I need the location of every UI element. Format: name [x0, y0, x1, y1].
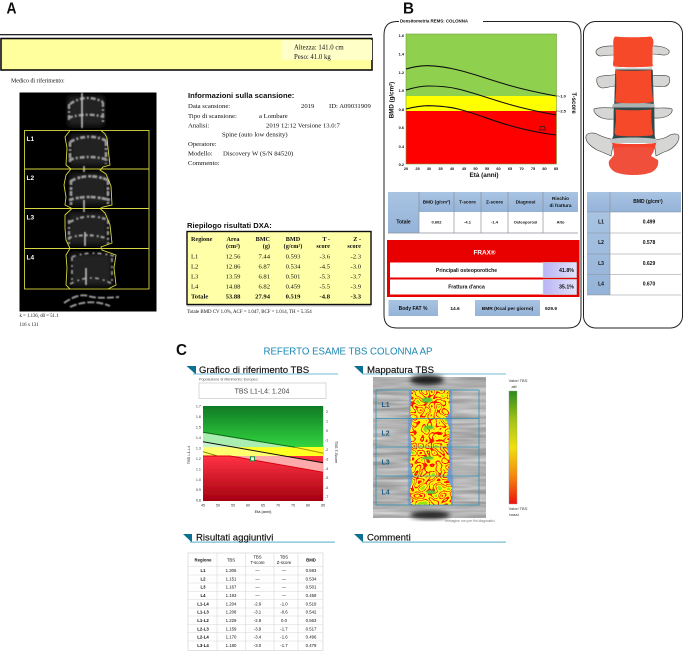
additional results table: 0.534: [306, 576, 317, 582]
vertebra BMD table: L2: [598, 240, 604, 246]
vertebra BMD table: 0.670: [643, 282, 655, 288]
DXA results table: 6.81: [258, 274, 270, 280]
TBS chart: 45: [201, 504, 205, 508]
additional results table: Regione: [195, 558, 212, 562]
DXA spine scan: [20, 92, 156, 312]
spine panel frame: [584, 22, 682, 328]
heading: TBS mapping: [354, 365, 506, 376]
DXA spine scan: L1: [26, 136, 34, 143]
DXA results table: L2: [191, 264, 198, 270]
TBS chart: 1.3: [196, 446, 201, 450]
additional results table: 0.517: [306, 626, 317, 632]
scan information: Analisi:: [188, 122, 209, 130]
label A: A: [6, 0, 17, 18]
additional results table: 1.151: [226, 576, 237, 582]
BMD age chart: 0.8: [399, 107, 405, 112]
additional results table: L1-L3: [197, 610, 209, 614]
heading: comments: [354, 532, 506, 544]
DXA results table: score: [347, 243, 361, 250]
TBS map image: [373, 375, 486, 519]
additional results table: L2: [200, 576, 206, 582]
additional results table: -1.7: [280, 626, 288, 632]
TBS chart: 85: [321, 504, 325, 508]
FRAX box: [387, 240, 580, 297]
DXA results table: 14.88: [226, 284, 241, 290]
BMD age chart: T-score: [570, 92, 576, 114]
TBS chart: 65: [261, 504, 265, 508]
summary table: Rischio: [552, 196, 569, 201]
BMD age chart: 1.4: [399, 52, 405, 56]
table footnote: Totale BMD CV 1.0%, ACF = 1.047, BCF = 1.014, TH = 5.354: [187, 310, 312, 315]
TBS chart: 1.4: [196, 436, 201, 440]
summary table: -1.4: [491, 220, 499, 224]
chart title: Densitometria REMS: COLONNA: [400, 18, 469, 24]
scan information: a Lombare: [259, 113, 288, 120]
vertebra BMD table: L3: [598, 261, 604, 267]
additional results table: BMD: [306, 558, 316, 562]
BMD age chart: 0.2: [399, 162, 405, 167]
DXA results table: 53.88: [226, 294, 241, 300]
TBS value box: [199, 383, 326, 398]
additional results table: -1.7: [280, 643, 288, 648]
body fat and BMR: 14.6: [450, 306, 460, 312]
DXA results table: -5.3: [320, 274, 331, 280]
additional results table: 1.170: [226, 634, 237, 640]
additional results table: 0.0: [281, 618, 288, 623]
TBS colour scale: Valori TBS: [509, 378, 528, 383]
additional results table: —: [255, 584, 260, 590]
TBS chart: 1.1: [196, 468, 201, 472]
BMD age chart: 75: [531, 166, 536, 171]
additional results table: T-score: [250, 560, 265, 565]
DXA results table: [187, 232, 371, 306]
DXA results table: L3: [191, 274, 199, 280]
BMD age chart: [388, 33, 576, 179]
additional results table: TBS: [280, 554, 288, 560]
body fat and BMR: Body FAT %: [399, 306, 428, 312]
BMD age chart: Età (anni): [469, 172, 499, 179]
summary table: -4.1: [464, 220, 472, 224]
additional results table: 0.563: [306, 618, 317, 623]
additional results table: 1.208: [226, 610, 237, 614]
TBS chart: 80: [306, 504, 310, 508]
TBS chart: 60: [246, 504, 250, 508]
additional results table: -3.9: [254, 626, 262, 632]
BMD age chart: 25: [415, 166, 420, 171]
DXA results table: 7.44: [258, 254, 271, 260]
scan caption: [20, 314, 59, 328]
additional results table: TBS: [253, 554, 262, 560]
DXA spine scan: L2: [26, 175, 34, 182]
additional results table: 1.167: [226, 584, 237, 590]
body fat and BMR: 929.9: [545, 306, 557, 312]
DXA results table: (g/cm²): [284, 243, 302, 250]
vertebra BMD table: 0.578: [643, 240, 655, 246]
BMD age chart: 1.2: [399, 70, 405, 75]
additional results table: L1-L4: [197, 602, 209, 606]
additional results table: 1.193: [226, 593, 237, 598]
additional results table: L4: [200, 593, 206, 598]
DXA results table: -2.3: [351, 254, 362, 260]
TBS map image: L4: [382, 490, 390, 496]
BMD age chart: 40: [450, 166, 454, 171]
TBS chart: -2: [325, 448, 328, 452]
DXA results table: Z -: [353, 236, 361, 243]
DXA results table: T -: [322, 236, 330, 243]
vertebra BMD table: [587, 192, 681, 295]
scan information: Spine (auto low density): [222, 132, 288, 138]
additional results table: 0.459: [306, 593, 317, 598]
additional results table: —: [255, 568, 260, 573]
heading: additional results: [183, 532, 335, 544]
summary table: Osteoporosi: [514, 220, 537, 224]
additional results table: Z-score: [277, 560, 292, 565]
BMD age chart: 30: [427, 166, 431, 171]
summary table: 0.602: [431, 220, 442, 224]
BMD age chart: 50: [473, 166, 478, 171]
TBS chart: 1.6: [196, 415, 201, 419]
BMD age chart: 1.0: [399, 88, 404, 93]
panel B: REMS densitometry: [384, 0, 682, 328]
report title: REFERTO ESAME TBS COLONNA AP: [263, 346, 433, 358]
TBS chart: -5: [325, 476, 328, 480]
additional results table: -3.1: [254, 610, 262, 614]
vertebra BMD table: 0.629: [643, 261, 655, 267]
additional results table: -1.0: [280, 602, 288, 606]
heading: TBS mapping: Mappatura TBS: [367, 365, 434, 376]
additional results table: -3.4: [254, 634, 262, 640]
TBS map image: L2: [382, 430, 390, 438]
vertebra BMD table: L4: [598, 282, 604, 288]
TBS map image: L1: [382, 402, 390, 409]
summary table: [388, 192, 578, 233]
DXA results table: 13.59: [226, 274, 241, 280]
BMD age chart: -1.0: [559, 94, 567, 98]
DXA results table: -4.5: [320, 264, 331, 270]
scan information: Operatore:: [188, 141, 217, 148]
scan information: ID: A09031909: [329, 103, 371, 110]
vertebra BMD table: 0.499: [643, 220, 655, 226]
FRAX box: 41.8%: [559, 268, 574, 274]
BMD age chart: 60: [496, 166, 501, 171]
additional results table: 0.542: [306, 610, 317, 614]
DXA results table: 12.86: [226, 264, 241, 270]
additional results table: —: [282, 576, 287, 582]
scan information: Commento:: [188, 160, 220, 167]
TBS chart: [186, 404, 339, 514]
BMD age chart: 1.6: [399, 33, 405, 38]
additional results table: -1.6: [280, 634, 288, 640]
TBS colour scale: [509, 378, 528, 517]
TBS colour scale: bassi: [509, 512, 519, 517]
scan information: 2019 12:12 Versione 13.0:7: [266, 122, 340, 130]
additional results table: -0.6: [280, 610, 288, 614]
additional results table: 0.501: [306, 584, 317, 590]
population note: Popolazione di riferimento: Europeo: [199, 378, 258, 382]
body fat and BMR: BMR (Kcal per giorno): [482, 306, 534, 312]
scan information: 2019: [301, 103, 315, 110]
scan caption: 116 x 131: [20, 323, 39, 328]
patient banner: [0, 34, 372, 70]
additional results table: 0.519: [306, 602, 317, 606]
TBS chart: 1.0: [196, 478, 201, 482]
BMD age chart: -2.5: [559, 108, 567, 114]
heading: TBS reference chart: Grafico di riferimento TBS: [199, 365, 309, 376]
FRAX box: Frattura d'anca: [448, 284, 485, 290]
DXA results table: 12.56: [226, 254, 241, 260]
TBS chart: -4: [325, 467, 328, 471]
label B: B: [403, 0, 414, 18]
DXA results table: (cm²): [226, 243, 240, 250]
additional results table: 1.306: [226, 568, 237, 573]
additional results table: 0.496: [306, 634, 317, 640]
DXA results table: L4: [191, 284, 199, 290]
BMD age chart: 0.4: [399, 144, 405, 149]
TBS chart: -6: [325, 486, 328, 490]
TBS chart: 0.8: [196, 498, 201, 502]
panel C: TBS report: [176, 342, 528, 650]
additional results table: -2.9: [254, 602, 262, 606]
summary table: Diagnosi: [516, 200, 535, 204]
TBS map image: L3: [382, 460, 390, 466]
vertebra BMD table: BMD (g/cm²): [633, 199, 663, 205]
DXA results table: L1: [191, 254, 198, 260]
additional results table: —: [255, 593, 260, 598]
BMD age chart: 80: [542, 166, 547, 171]
additional results table: 1.204: [226, 602, 237, 606]
TBS chart: -1: [325, 438, 328, 442]
BMD age chart: 55: [485, 166, 490, 171]
DXA results table: -3.7: [351, 274, 362, 280]
additional results table: -3.0: [254, 643, 262, 648]
scan caption: k = 1.136, d0 = 51.1: [20, 314, 59, 319]
summary table: Alto: [557, 220, 565, 224]
TBS chart: TBS T-Score: [334, 441, 339, 463]
DXA results table: Regione: [191, 236, 213, 243]
TBS chart: 55: [231, 504, 235, 508]
TBS chart: 2: [326, 410, 328, 414]
scan information: Modello:: [188, 150, 213, 158]
DXA results table: (g): [263, 243, 270, 250]
summary table: di frattura: [550, 203, 572, 208]
additional results table: —: [255, 576, 260, 582]
BMD age chart: 85: [554, 166, 559, 171]
FRAX box: FRAX®: [473, 248, 496, 256]
FRAX box: Principali osteoporotiche: [436, 268, 497, 274]
DXA results table: Area: [227, 236, 239, 243]
additional results table: 1.180: [226, 643, 237, 648]
TBS chart: 1.5: [196, 426, 201, 430]
TBS chart: -7: [325, 495, 328, 499]
TBS chart: 0.9: [196, 488, 201, 492]
DXA spine scan: L3: [26, 214, 34, 222]
additional results table: L2-L4: [197, 634, 209, 640]
DXA results table: score: [316, 243, 330, 250]
TBS colour scale: alti: [511, 384, 517, 389]
scan information: Informazioni sulla scansione:: [188, 91, 294, 100]
DXA results table: BMD: [286, 236, 301, 243]
DXA results table: 6.87: [258, 264, 271, 270]
additional results table: L1: [200, 568, 206, 573]
additional results table: L1-L2: [197, 618, 209, 623]
TBS chart: 1: [326, 420, 328, 424]
panel A: DXA report: [0, 0, 372, 328]
summary table: T-score: [459, 200, 476, 204]
patient banner: Altezza: 141.0 cm: [294, 44, 344, 52]
TBS chart: 70: [276, 504, 280, 508]
DXA results table: -3.0: [351, 264, 362, 270]
DXA results table: -3.3: [351, 294, 362, 300]
DXA results table: 0.501: [286, 274, 300, 280]
3D spine model: [586, 36, 679, 175]
heading: comments: Commenti: [367, 532, 411, 544]
scan information: Discovery W (S/N 84520): [223, 150, 293, 158]
map disclaimer: Immagine non per fini diagnostici: [445, 519, 495, 523]
vertebra BMD table: L1: [598, 220, 604, 226]
TBS chart: 1.2: [196, 457, 201, 461]
referring physician: Medico di riferimento:: [11, 78, 65, 84]
DXA results table: 0.534: [286, 264, 301, 270]
TBS chart: Età (anni): [255, 509, 272, 514]
DXA results table: 6.82: [258, 284, 270, 290]
additional results table: 1.159: [226, 626, 237, 632]
patient banner: Peso: 41.0 kg: [294, 54, 331, 61]
additional results table: —: [282, 568, 287, 573]
BMD age chart: 35: [438, 166, 443, 171]
DXA results table: 0.459: [286, 284, 301, 290]
DXA results table: 0.593: [286, 254, 301, 260]
additional results table: L3: [200, 584, 206, 590]
REMS panel frame: [384, 22, 581, 328]
summary table: Z-score: [486, 200, 503, 204]
scan information: [188, 91, 371, 167]
BMD age chart: 45: [462, 166, 467, 171]
additional results table: L2-L3: [197, 626, 209, 632]
TBS chart: -3: [325, 458, 328, 462]
TBS chart: 50: [216, 504, 220, 508]
additional results table: L3-L4: [197, 643, 209, 648]
DXA results table: Totale: [191, 294, 208, 300]
DXA results table: 27.94: [255, 294, 271, 300]
TBS value box: TBS L1-L4: 1.204: [235, 388, 290, 396]
TBS chart: TBS L1-L4: [186, 445, 191, 464]
heading: additional results: Risultati aggiuntivi: [196, 532, 273, 544]
TBS chart: 75: [291, 504, 295, 508]
DXA results table: -5.5: [320, 284, 331, 290]
additional results table: TBS: [227, 558, 235, 562]
BMD age chart: 20: [404, 166, 408, 171]
TBS chart: 1.7: [196, 404, 201, 408]
BMD age chart: 65: [508, 166, 513, 171]
scan information: Tipo di scansione:: [188, 113, 237, 120]
label C: C: [176, 342, 187, 359]
additional results table: 0.479: [306, 643, 317, 648]
body fat and BMR: [388, 300, 557, 316]
additional results table: —: [282, 593, 287, 598]
summary table: BMD (g/cm²): [423, 200, 451, 204]
additional results table: 0.593: [306, 568, 317, 573]
DXA results table: -3.6: [320, 254, 331, 260]
DXA results heading: Riepilogo risultati DXA:: [187, 221, 272, 230]
FRAX box: 35.1%: [559, 284, 574, 290]
additional results table: 1.229: [226, 618, 237, 623]
BMD age chart: BMD (g/cm²): [388, 82, 396, 118]
BMD age chart: 0.6: [399, 125, 405, 130]
DXA spine scan: L4: [26, 254, 34, 262]
additional results table: [188, 553, 323, 650]
TBS chart: 0: [326, 429, 328, 433]
additional results table: —: [282, 584, 287, 590]
DXA results table: BMC: [256, 236, 270, 243]
additional results table: -2.8: [254, 618, 262, 623]
DXA results table: 0.519: [286, 294, 301, 300]
scan information: Data scansione:: [188, 103, 230, 110]
BMD age chart: 70: [519, 166, 524, 171]
DXA results table: -4.8: [320, 294, 331, 300]
summary table: Totale: [396, 220, 411, 226]
TBS colour scale: Valori TBS: [509, 506, 528, 511]
DXA results table: -3.9: [351, 284, 362, 290]
